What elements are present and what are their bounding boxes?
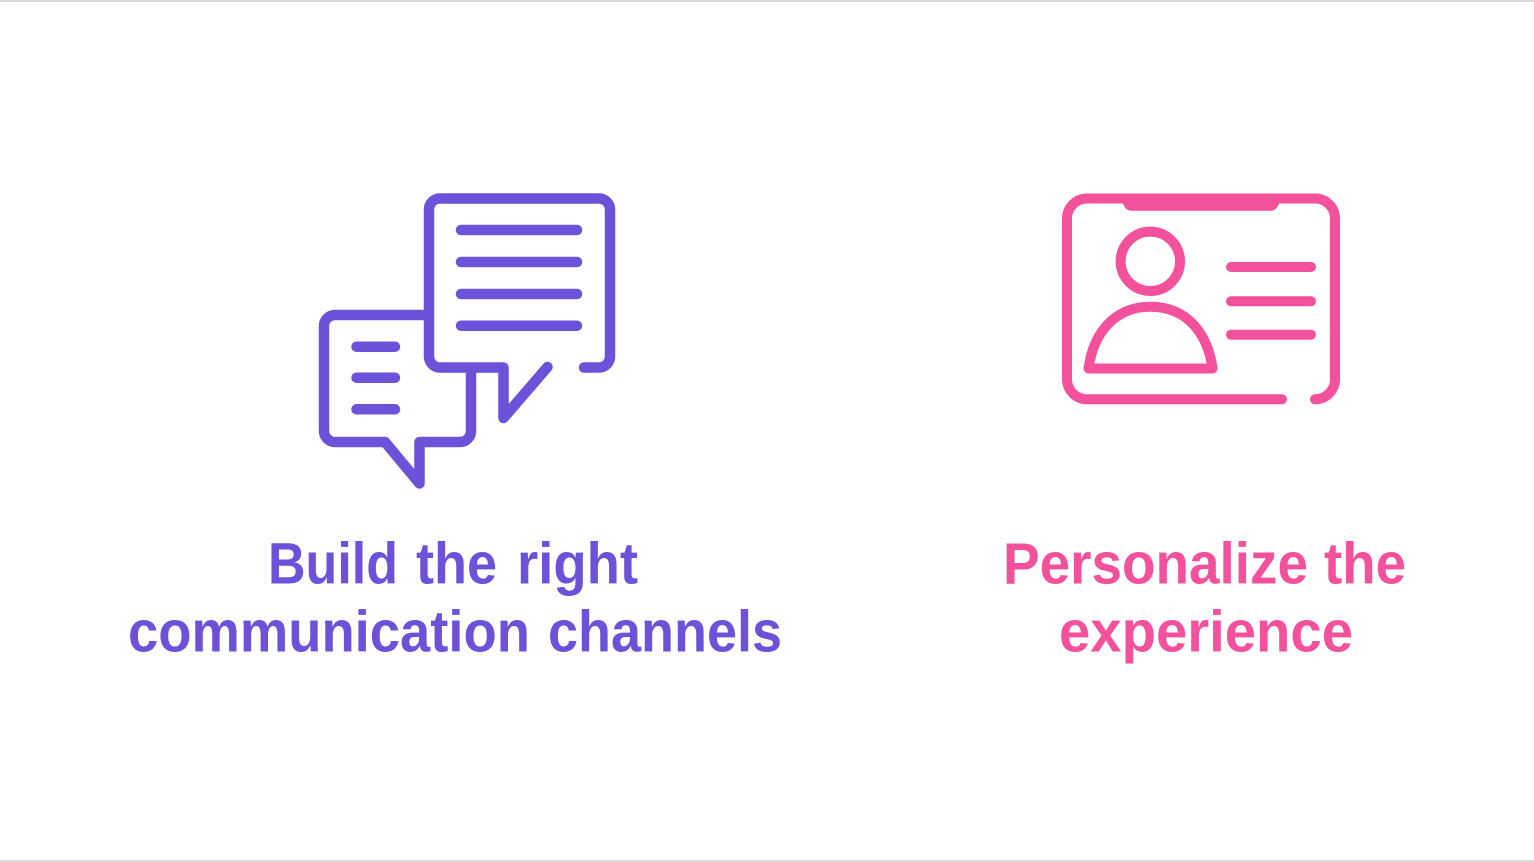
panel: communication channels xyxy=(128,198,782,665)
card text lines xyxy=(1231,267,1311,335)
card clip notch xyxy=(1122,198,1280,211)
heading: build the right communication channels: Build xyxy=(268,531,398,596)
large speech bubble xyxy=(429,198,610,418)
heading: build the right communication channels: right xyxy=(517,531,638,596)
heading: personalize the experience: experience xyxy=(1059,600,1353,665)
heading: build the right communication channels: communication xyxy=(128,600,530,665)
card outline xyxy=(1067,198,1335,399)
panel: personalize the experience xyxy=(1003,198,1406,665)
profile shoulders xyxy=(1088,307,1212,368)
heading: personalize the experience: Personalize xyxy=(1003,531,1308,596)
small bubble text lines xyxy=(356,347,395,409)
profile head xyxy=(1121,232,1180,291)
icon: speech bubbles xyxy=(324,198,610,484)
small speech bubble xyxy=(324,315,471,484)
heading: personalize the experience: the xyxy=(1324,531,1406,596)
heading: build the right communication channels: the xyxy=(416,531,497,596)
icon: id card xyxy=(1067,198,1335,399)
heading: build the right communication channels: channels xyxy=(548,600,782,665)
heading: build the right communication channels xyxy=(128,531,782,665)
large bubble text lines xyxy=(461,230,577,326)
heading: personalize the experience xyxy=(1003,531,1406,665)
